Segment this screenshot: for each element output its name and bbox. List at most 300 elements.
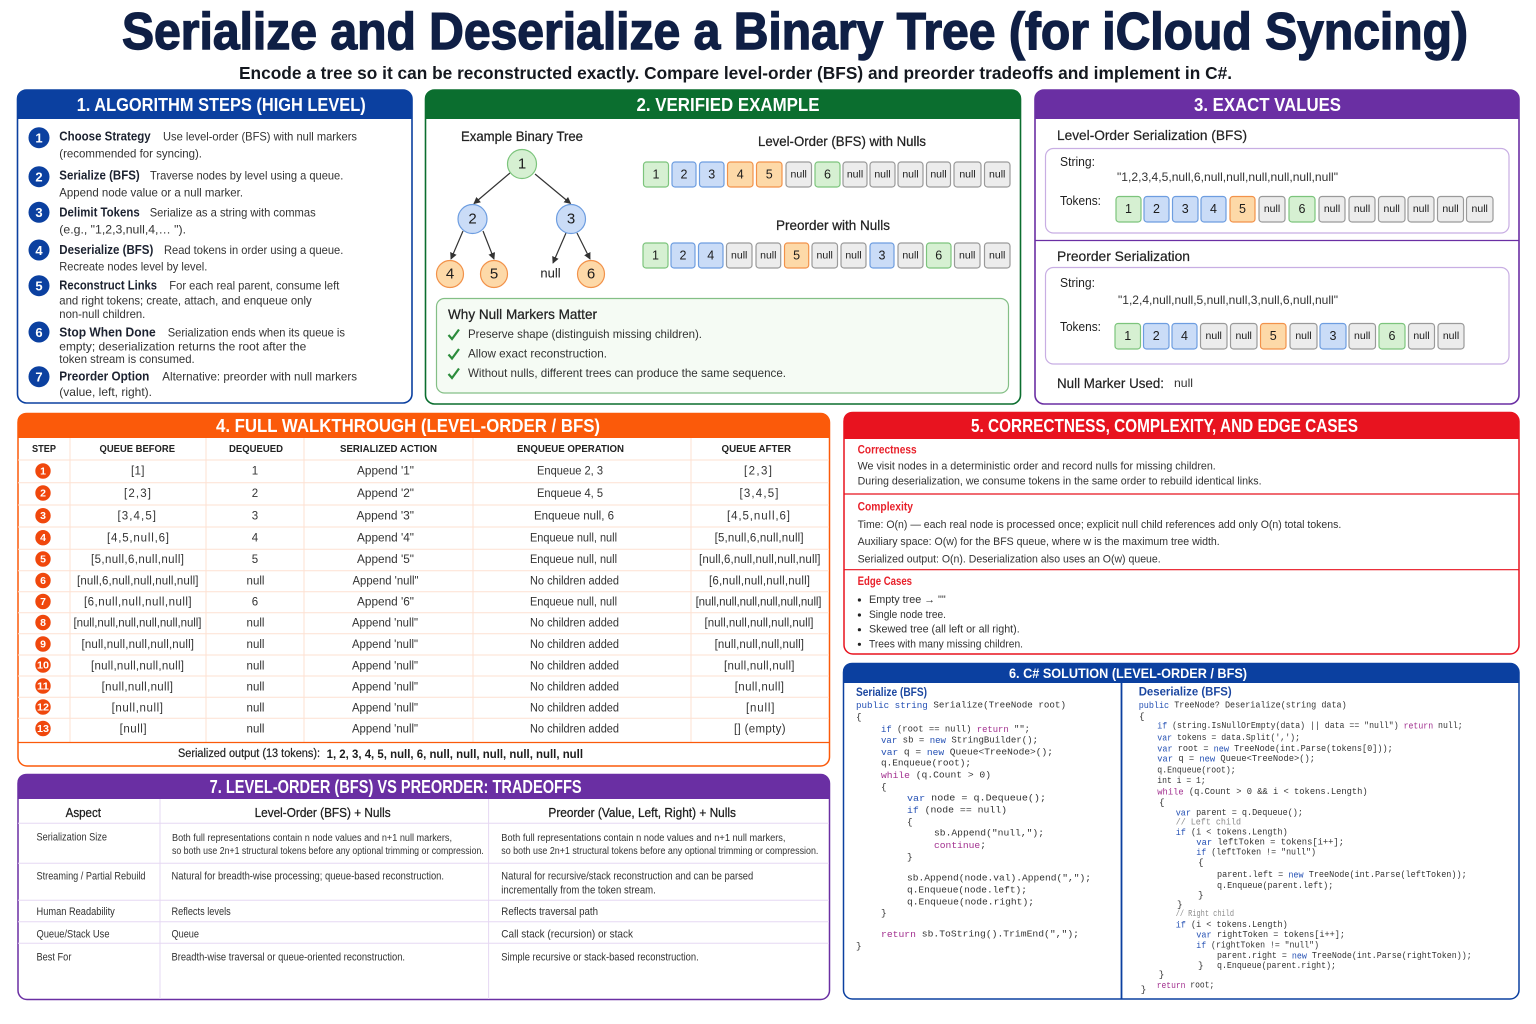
- preorder values box: null: [1206, 330, 1222, 342]
- level-order values box: null: [1413, 203, 1429, 215]
- row 12: [null,null]: [112, 702, 163, 714]
- level-order token row: null: [989, 168, 1005, 180]
- row 13: [35, 720, 786, 736]
- row 11: 11: [37, 680, 49, 692]
- code: serialize: {: [856, 712, 862, 722]
- binary tree diagram: 5: [490, 266, 498, 282]
- preorder values box: 6: [1389, 329, 1396, 343]
- heading: tradeoffs: 7. LEVEL-ORDER (BFS) VS PREORDER: TRADEOFFS: [210, 777, 582, 797]
- row 12: Append 'null": [352, 702, 418, 714]
- preorder token row: null: [817, 250, 833, 262]
- binary tree diagram: 1: [518, 156, 526, 172]
- row: serialization size: Both full representations contain n node values and n+1 null markers,: [501, 833, 786, 844]
- level-order token row: null: [930, 168, 947, 180]
- section: edge cases: [858, 576, 1023, 650]
- row 8: null: [247, 618, 264, 630]
- level-order heading: Level-Order (BFS) with Nulls: [758, 133, 926, 149]
- section: correctness: Correctness: [858, 445, 917, 457]
- step 3: Delimit Tokens: [59, 206, 140, 220]
- level-order values box: null: [1442, 203, 1459, 215]
- code: serialize: sb.Append(node.val).Append(",");: [907, 872, 1091, 884]
- step 7: 7: [35, 370, 43, 384]
- row: serialization size: [36, 831, 818, 857]
- level-order token row: null: [902, 168, 919, 180]
- code: deserialize: }: [1159, 969, 1164, 980]
- row: serialization size: Serialization Size: [36, 831, 107, 843]
- code: deserialize: if (rightToken != "null"): [1196, 940, 1319, 950]
- step 2: Serialize (BFS): [59, 169, 140, 183]
- table header: Preorder (Value, Left, Right) + Nulls: [548, 805, 736, 820]
- row 12: [null]: [746, 702, 774, 714]
- code: deserialize: int i = 1;: [1157, 775, 1206, 786]
- row: streaming: [36, 871, 753, 897]
- level-order values box: [1046, 148, 1509, 233]
- preorder values box: "1,2,4,null,null,5,null,null,3,null,6,null,null": [1118, 293, 1338, 307]
- row 8: [null,null,null,null,null]: [704, 618, 814, 630]
- callout: why null markers matter: Preserve shape (distinguish missing children).: [468, 327, 702, 341]
- table header: [66, 805, 736, 820]
- row 7: 6: [252, 597, 258, 609]
- preorder token row: 2: [680, 248, 687, 262]
- preorder token row: null: [902, 250, 919, 262]
- row 5: [35, 551, 820, 567]
- row 1: Enqueue 2, 3: [537, 465, 603, 477]
- code: deserialize: }: [1141, 984, 1146, 995]
- level-order values box: null: [1324, 203, 1340, 215]
- code: serialize: if (root == null) return "";: [881, 724, 1030, 734]
- level-order values box: String:: [1060, 155, 1095, 169]
- row 10: No children added: [530, 660, 619, 672]
- callout: why null markers matter: [436, 298, 1008, 393]
- row: serialization size: so both use 2n+1 structural tokens before any optional trimming or compression.: [172, 846, 484, 857]
- row: streaming: incrementally from the token stream.: [501, 885, 656, 897]
- row 9: [null,null,null,null]: [715, 639, 804, 651]
- preorder heading: Preorder with Nulls: [776, 217, 890, 233]
- row 4: [4,5,null,6]: [107, 533, 169, 545]
- preorder token row: 3: [879, 248, 886, 262]
- code: deserialize: {: [1198, 857, 1204, 868]
- preorder token row: 5: [793, 248, 800, 262]
- level-order values box: 6: [1299, 202, 1306, 216]
- heading: walkthrough: 4. FULL WALKTHROUGH (LEVEL-ORDER / BFS): [216, 416, 600, 436]
- step 3: (e.g., "1,2,3,null,4,… ").: [59, 222, 186, 236]
- row 2: 2: [252, 488, 258, 500]
- serialized output footer: Serialized output (13 tokens):: [178, 748, 320, 760]
- row: streaming: Natural for recursive/stack reconstruction and can be parsed: [501, 871, 753, 883]
- row 10: [null,null,null,null]: [91, 660, 184, 672]
- row 3: [3,4,5]: [118, 510, 156, 522]
- binary tree diagram: 3: [567, 210, 575, 228]
- row: queue/stack use: Queue/Stack Use: [36, 929, 110, 941]
- row: serialization size: so both use 2n+1 structural tokens before any optional trimming or compression.: [501, 846, 818, 857]
- section: edge cases: Single node tree.: [869, 609, 946, 621]
- code: serialize: }: [907, 852, 913, 862]
- row 5: 5: [40, 553, 46, 565]
- row 7: [6,null,null,null,null]: [84, 597, 192, 609]
- level-order values box: 1: [1125, 202, 1132, 216]
- step 3: [28, 202, 316, 236]
- row 9: [null,null,null,null,null]: [82, 639, 194, 651]
- code: serialize: return sb.ToString().TrimEnd(",");: [881, 928, 1079, 940]
- section: edge cases: Skewed tree (all left or all right).: [869, 624, 1020, 636]
- title: Serialize and Deserialize a Binary Tree (for iCloud Syncing): [122, 3, 1468, 61]
- serialized output footer: [178, 747, 583, 761]
- code: deserialize: q.Enqueue(parent.left);: [1217, 880, 1333, 891]
- row 3: Enqueue null, 6: [534, 510, 614, 522]
- panel: full walkthrough: [18, 413, 830, 766]
- row 9: No children added: [530, 639, 619, 651]
- step 4: Deserialize (BFS): [59, 243, 153, 257]
- row 7: [null,null,null,null,null,null]: [696, 597, 822, 609]
- code: deserialize: {: [1159, 797, 1165, 808]
- step 6: 6: [35, 325, 43, 340]
- step 7: [28, 366, 357, 399]
- row 7: [35, 594, 822, 610]
- step 4: 4: [35, 243, 43, 258]
- row 2: 2: [40, 487, 46, 499]
- row 4: Enqueue null, null: [530, 533, 617, 545]
- code: deserialize: }: [1198, 890, 1204, 900]
- code: deserialize: public TreeNode? Deserialize(string data): [1139, 700, 1347, 710]
- level-order values box: null: [1264, 203, 1280, 215]
- section: complexity: Time: O(n) — each real node is processed once; explicit null child references add only O(n) total tokens.: [858, 519, 1341, 531]
- code: serialize: }: [881, 908, 887, 918]
- preorder values box: null: [1295, 330, 1312, 342]
- callout: why null markers matter: Why Null Markers Matter: [448, 306, 597, 322]
- code: deserialize: // Right child: [1176, 908, 1234, 919]
- level-order token row: 4: [737, 168, 744, 182]
- row 11: [null,null]: [735, 681, 784, 693]
- preorder token row: null: [760, 250, 776, 262]
- panel: tradeoffs: [18, 774, 830, 1000]
- preorder values box: Tokens:: [1060, 320, 1101, 334]
- row 9: null: [247, 639, 264, 651]
- row 5: Enqueue null, null: [530, 554, 617, 566]
- level-order values box: null: [1354, 203, 1370, 215]
- row 1: [2,3]: [744, 465, 772, 477]
- preorder values box: null: [1354, 330, 1370, 342]
- row 1: 1: [252, 465, 258, 477]
- row 3: 3: [40, 510, 46, 522]
- row 11: [35, 678, 784, 694]
- section: complexity: Complexity: [858, 502, 914, 514]
- preorder token row: null: [845, 250, 862, 262]
- row 1: 1: [40, 465, 46, 477]
- row 7: Enqueue null, null: [530, 597, 617, 609]
- row: human readability: Reflects levels: [172, 906, 231, 918]
- row 10: [35, 657, 794, 673]
- section: complexity: [858, 502, 1341, 565]
- step 2: [28, 166, 343, 199]
- code: deserialize: Deserialize (BFS): [1139, 687, 1232, 699]
- row 9: Append 'null": [352, 639, 418, 651]
- code: serialize: Serialize (BFS): [856, 687, 927, 699]
- level-order token row: null: [874, 168, 891, 180]
- step 5: For each real parent, consume left: [169, 279, 340, 293]
- preorder values box: 1: [1124, 329, 1131, 343]
- code: deserialize: var parent = q.Dequeue();: [1176, 807, 1303, 818]
- level-order values box: 5: [1239, 202, 1246, 216]
- section: edge cases: Empty tree → "": [869, 594, 946, 606]
- level-order token row: 3: [708, 168, 715, 182]
- preorder values box: 5: [1270, 329, 1277, 343]
- preorder values box: String:: [1060, 276, 1095, 290]
- step 6: [28, 322, 345, 366]
- row 6: No children added: [530, 576, 619, 588]
- code: serialize: var q = new Queue<TreeNode>();: [881, 746, 1053, 758]
- code: deserialize: q.Enqueue(parent.right);: [1217, 960, 1336, 971]
- row: serialization size: Both full representations contain n node values and n+1 null markers,: [172, 833, 452, 844]
- preorder token row: 1: [652, 248, 659, 262]
- row: streaming: Streaming / Partial Rebuild: [36, 871, 146, 883]
- row 3: [4,5,null,6]: [727, 510, 790, 522]
- preorder values box: null: [1236, 330, 1252, 342]
- step 5: non-null children.: [59, 307, 145, 321]
- row: human readability: Reflects traversal path: [501, 906, 598, 918]
- row 2: [3,4,5]: [740, 488, 778, 500]
- step 6: Stop When Done: [59, 325, 156, 339]
- section: correctness: We visit nodes in a deterministic order and record nulls for missing children.: [858, 461, 1216, 473]
- row 3: 3: [252, 510, 258, 522]
- level-order token row: [644, 162, 1010, 187]
- row 7: 7: [40, 596, 46, 608]
- table header row: SERIALIZED ACTION: [340, 443, 437, 455]
- code: serialize: continue;: [934, 840, 986, 850]
- row 4: 4: [252, 533, 259, 545]
- row 13: No children added: [530, 723, 619, 735]
- row: best for: [36, 951, 699, 963]
- preorder token row: 6: [935, 248, 942, 262]
- callout: why null markers matter: Allow exact reconstruction.: [468, 346, 607, 360]
- level-order token row: null: [959, 168, 976, 180]
- level-order token row: null: [791, 168, 807, 180]
- callout: why null markers matter: Without nulls, different trees can produce the same sequence.: [468, 366, 786, 380]
- row 10: null: [247, 660, 264, 672]
- code: serialize: sb.Append("null,");: [934, 828, 1044, 838]
- heading: C# solution: 6. C# SOLUTION (LEVEL-ORDER / BFS): [1009, 665, 1247, 681]
- row 4: [5,null,6,null,null]: [715, 533, 804, 545]
- row 1: [1]: [131, 465, 144, 477]
- row 6: [6,null,null,null,null]: [709, 576, 810, 588]
- step 5: Reconstruct Links: [59, 279, 157, 293]
- level-order token row: 5: [766, 168, 773, 182]
- code: deserialize: return root;: [1157, 980, 1214, 990]
- row 9: 9: [40, 638, 46, 650]
- row 6: null: [247, 576, 264, 588]
- step 5: and right tokens; create, attach, and enqueue only: [59, 294, 312, 308]
- subtitle: Encode a tree so it can be reconstructed exactly. Compare level-order (BFS) and preorder tradeoffs and implement in C#.: [239, 63, 1232, 83]
- row 4: [35, 530, 804, 546]
- code: deserialize: parent.right = new TreeNode(int.Parse(rightToken));: [1217, 950, 1472, 961]
- table header row: QUEUE BEFORE: [100, 443, 175, 455]
- step 2: Append node value or a null marker.: [59, 185, 243, 199]
- table header row: ENQUEUE OPERATION: [517, 443, 624, 455]
- row 7: Append '6": [357, 597, 414, 609]
- level-order values box: 4: [1210, 202, 1217, 216]
- level-order values box: Tokens:: [1060, 194, 1101, 208]
- row: streaming: Natural for breadth-wise processing; queue-based reconstruction.: [172, 871, 444, 883]
- code: serialize: [856, 687, 1091, 952]
- section: complexity: Serialized output: O(n). Deserialization also uses an O(w) queue.: [858, 553, 1161, 565]
- preorder subheading: Preorder Serialization: [1057, 248, 1190, 264]
- heading: exact values: 3. EXACT VALUES: [1194, 95, 1341, 115]
- step 6: empty; deserialization returns the root after the: [59, 340, 307, 354]
- code: deserialize: if (i < tokens.Length): [1176, 826, 1288, 838]
- row 1: Append '1": [357, 465, 414, 477]
- step 2: 2: [35, 170, 43, 184]
- preorder values box: 2: [1153, 329, 1160, 343]
- row: queue/stack use: Call stack (recursion) or stack: [501, 929, 633, 941]
- row 4: Append '4": [357, 533, 414, 545]
- step 6: Serialization ends when its queue is: [168, 325, 345, 339]
- row 13: [null]: [120, 723, 147, 735]
- preorder token row: 4: [707, 248, 714, 262]
- step 3: 3: [35, 205, 43, 220]
- panel: exact values: [1034, 90, 1519, 404]
- code: serialize: q.Enqueue(node.left);: [907, 884, 1027, 896]
- step 4: Read tokens in order using a queue.: [164, 243, 343, 257]
- step 5: [28, 275, 340, 321]
- level-order token row: 6: [824, 168, 831, 182]
- heading: correctness: 5. CORRECTNESS, COMPLEXITY, AND EDGE CASES: [971, 416, 1358, 436]
- row: best for: Simple recursive or stack-based reconstruction.: [501, 951, 699, 963]
- preorder token row: [643, 243, 1010, 268]
- step 1: 1: [35, 130, 43, 146]
- table header row: DEQUEUED: [229, 443, 283, 455]
- code: deserialize: var tokens = data.Split(',');: [1157, 732, 1300, 743]
- step 7: Preorder Option: [59, 370, 149, 384]
- section: edge cases: Trees with many missing children.: [869, 638, 1023, 650]
- row 8: [35, 614, 814, 630]
- row 1: [35, 463, 772, 479]
- preorder token row: null: [959, 250, 975, 262]
- code: deserialize: [1139, 687, 1472, 995]
- row 10: [null,null,null]: [724, 660, 794, 672]
- code: serialize: public string Serialize(TreeNode root): [856, 700, 1066, 710]
- section: edge cases: Edge Cases: [858, 576, 912, 588]
- step 7: (value, left, right).: [59, 385, 152, 399]
- row 12: null: [247, 702, 264, 714]
- row: best for: Breadth-wise traversal or queue-oriented reconstruction.: [172, 951, 405, 963]
- preorder values box: 3: [1330, 329, 1337, 343]
- row: best for: Best For: [36, 951, 72, 963]
- section: complexity: Auxiliary space: O(w) for the BFS queue, where w is the maximum tree width.: [858, 536, 1220, 548]
- code: deserialize: }: [1198, 960, 1204, 971]
- code: serialize: q.Enqueue(root);: [881, 758, 971, 768]
- row 6: [null,6,null,null,null,null]: [77, 576, 198, 588]
- code: serialize: q.Enqueue(node.right);: [907, 896, 1034, 908]
- binary tree diagram: null: [540, 266, 561, 280]
- step 1: (recommended for syncing).: [59, 146, 202, 160]
- section: correctness: During deserialization, we consume tokens in the same order to rebuild identical links.: [858, 476, 1262, 488]
- panel: C# solution: [843, 663, 1519, 999]
- row 12: 12: [37, 701, 49, 713]
- null marker used: null: [1174, 376, 1193, 390]
- code: serialize: while (q.Count > 0): [881, 770, 991, 780]
- row 13: 13: [37, 723, 49, 735]
- level-order token row: 1: [653, 168, 660, 182]
- preorder values box: null: [1443, 330, 1459, 342]
- level-order token row: 2: [681, 168, 688, 182]
- table header: Aspect: [66, 805, 101, 820]
- code: deserialize: if (leftToken != "null"): [1196, 846, 1316, 858]
- table header: Level-Order (BFS) + Nulls: [255, 805, 391, 820]
- binary tree diagram: [436, 150, 604, 288]
- row 10: 10: [37, 659, 49, 671]
- heading: algorithm steps: 1. ALGORITHM STEPS (HIGH LEVEL): [77, 95, 366, 115]
- row: queue/stack use: Queue: [172, 929, 199, 941]
- step 4: Recreate nodes level by level.: [59, 259, 207, 273]
- row 10: Append 'null": [352, 660, 418, 672]
- level-order values box: 2: [1153, 202, 1160, 216]
- step 3: Serialize as a string with commas: [150, 206, 316, 220]
- code: deserialize: if (string.IsNullOrEmpty(data) || data == "null") return null;: [1157, 720, 1463, 731]
- heading: verified example: 2. VERIFIED EXAMPLE: [636, 95, 820, 115]
- code: serialize: if (node == null): [907, 804, 1007, 816]
- row 2: [2,3]: [124, 488, 151, 500]
- serialized output footer: 1, 2, 3, 4, 5, null, 6, null, null, null, null, null, null: [327, 747, 583, 761]
- table header row: QUEUE AFTER: [722, 443, 791, 455]
- code: serialize: {: [907, 816, 913, 828]
- level-order token row: null: [847, 168, 863, 180]
- row 13: null: [247, 723, 264, 735]
- binary tree diagram: 6: [587, 266, 595, 282]
- section: correctness: [858, 445, 1262, 488]
- row 11: null: [247, 681, 264, 693]
- step 4: [28, 240, 343, 273]
- row 5: [null,6,null,null,null,null]: [699, 554, 820, 566]
- step 2: Traverse nodes by level using a queue.: [150, 169, 343, 183]
- preorder token row: null: [731, 250, 747, 262]
- code: deserialize: // Left child: [1176, 816, 1241, 828]
- binary tree diagram: 4: [446, 266, 454, 282]
- preorder values box: null: [1413, 330, 1430, 342]
- code: deserialize: while (q.Count > 0 && i < tokens.Length): [1157, 786, 1368, 797]
- code: deserialize: {: [1139, 711, 1145, 722]
- row 2: Append '2": [357, 488, 414, 500]
- step 5: 5: [35, 278, 43, 294]
- row 11: Append 'null": [352, 681, 418, 693]
- row 6: 6: [40, 575, 46, 587]
- table header row: STEP: [32, 443, 56, 455]
- step 1: Choose Strategy: [59, 130, 151, 144]
- code: deserialize: }: [1177, 899, 1183, 910]
- tree heading: Example Binary Tree: [461, 128, 583, 144]
- row 2: Enqueue 4, 5: [537, 488, 603, 500]
- level-order values box: 3: [1182, 202, 1189, 216]
- row: queue/stack use: [36, 929, 633, 941]
- row 8: Append 'null": [352, 618, 418, 630]
- code: serialize: var node = q.Dequeue();: [907, 792, 1046, 804]
- panel: algorithm steps: [17, 90, 412, 403]
- row 11: [null,null,null]: [102, 681, 173, 693]
- row: human readability: [36, 906, 598, 918]
- level-order subheading: Level-Order Serialization (BFS): [1057, 127, 1247, 143]
- panel: correctness, complexity, edge cases: [844, 412, 1519, 654]
- row 4: 4: [40, 532, 46, 544]
- level-order values box: null: [1472, 203, 1488, 215]
- row 5: [5,null,6,null,null]: [91, 554, 184, 566]
- preorder values box: 4: [1181, 329, 1188, 343]
- panel: verified example: [425, 90, 1021, 404]
- row 9: [35, 636, 804, 652]
- row 13: [] (empty): [734, 723, 786, 735]
- row 6: [35, 572, 810, 588]
- row 5: 5: [252, 554, 258, 566]
- level-order values box: "1,2,3,4,5,null,6,null,null,null,null,null,null": [1117, 170, 1338, 184]
- code: deserialize: var root = new TreeNode(int.Parse(tokens[0]));: [1157, 743, 1393, 754]
- row 8: [null,null,null,null,null,null]: [74, 618, 202, 630]
